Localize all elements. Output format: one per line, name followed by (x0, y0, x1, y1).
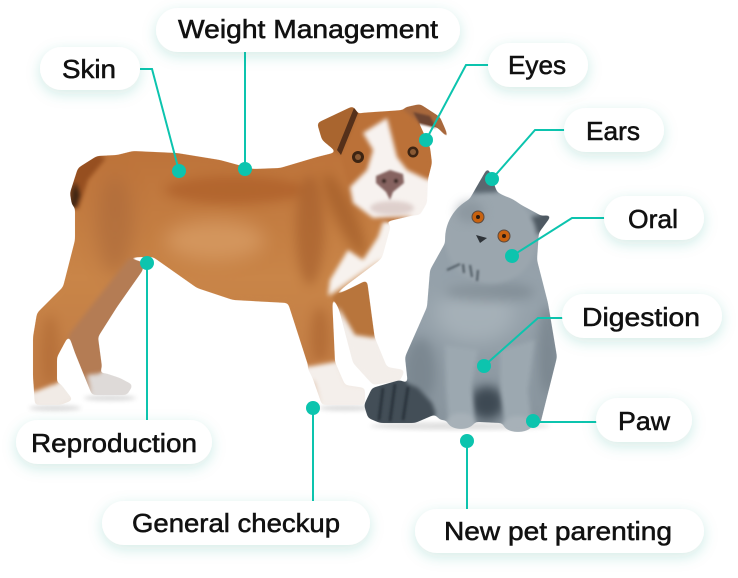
connector: oral (505, 218, 606, 263)
ground shadows under puppy paws (29, 395, 371, 411)
label: Eyes (488, 43, 588, 87)
connector: eyes (419, 65, 490, 147)
cat tail (364, 380, 436, 423)
connector: reproduction (140, 256, 154, 422)
label: Weight Management: Weight Management (178, 14, 439, 44)
muzzle shading (370, 201, 414, 215)
connector: paw (526, 414, 598, 428)
chest white patch (328, 222, 391, 296)
label: New pet parenting (415, 509, 704, 553)
label: Oral (604, 196, 704, 240)
white blaze and muzzle (350, 118, 428, 218)
cat face shading (456, 201, 484, 223)
tail (70, 156, 106, 210)
cat paws (447, 413, 475, 429)
ear left fold (337, 108, 358, 155)
ear right inner (413, 112, 436, 128)
cat ears (473, 167, 497, 193)
connector: weight management (238, 50, 252, 176)
label: Paw: Paw (618, 406, 670, 436)
far back leg (68, 258, 143, 395)
connector: new pet parenting (460, 434, 474, 511)
label: Paw (596, 398, 692, 442)
illustration: cat (364, 167, 558, 432)
connector: skin (140, 69, 186, 178)
label: Digestion (562, 294, 722, 338)
ear right (402, 104, 451, 142)
label: General checkup (102, 501, 370, 545)
connector: ears (485, 130, 566, 186)
ground shadow under cat (370, 422, 550, 430)
label: Digestion: Digestion (582, 302, 700, 332)
label: Skin: Skin (62, 54, 116, 84)
cat nose (476, 235, 487, 243)
connector: digestion (477, 318, 564, 373)
label: Reproduction: Reproduction (31, 428, 197, 458)
label: Ears: Ears (586, 116, 640, 146)
label: General checkup: General checkup (132, 508, 340, 538)
cat tail stripes (379, 384, 408, 421)
label: Eyes: Eyes (508, 50, 566, 80)
eyes (352, 146, 418, 163)
label: Weight Management (156, 8, 460, 52)
cat eyes (472, 211, 510, 242)
cat head (445, 194, 537, 284)
label: Reproduction (16, 420, 212, 464)
front paw (307, 362, 365, 405)
illustration: puppy (29, 104, 451, 411)
body and near legs (33, 150, 390, 405)
nose (376, 170, 404, 200)
head (340, 110, 432, 222)
cat body (405, 192, 557, 425)
label: New pet parenting: New pet parenting (444, 516, 672, 546)
cat front legs (445, 345, 478, 420)
connector: general checkup (306, 401, 320, 501)
label: Oral: Oral (628, 204, 678, 234)
puppy silhouette (33, 104, 451, 405)
label: Ears (564, 108, 664, 152)
cat silhouette (364, 167, 558, 432)
ear left (317, 106, 358, 155)
cat chest stripes (447, 264, 478, 281)
back paw (34, 383, 73, 405)
label: Skin (40, 47, 140, 90)
far front leg (333, 280, 375, 345)
